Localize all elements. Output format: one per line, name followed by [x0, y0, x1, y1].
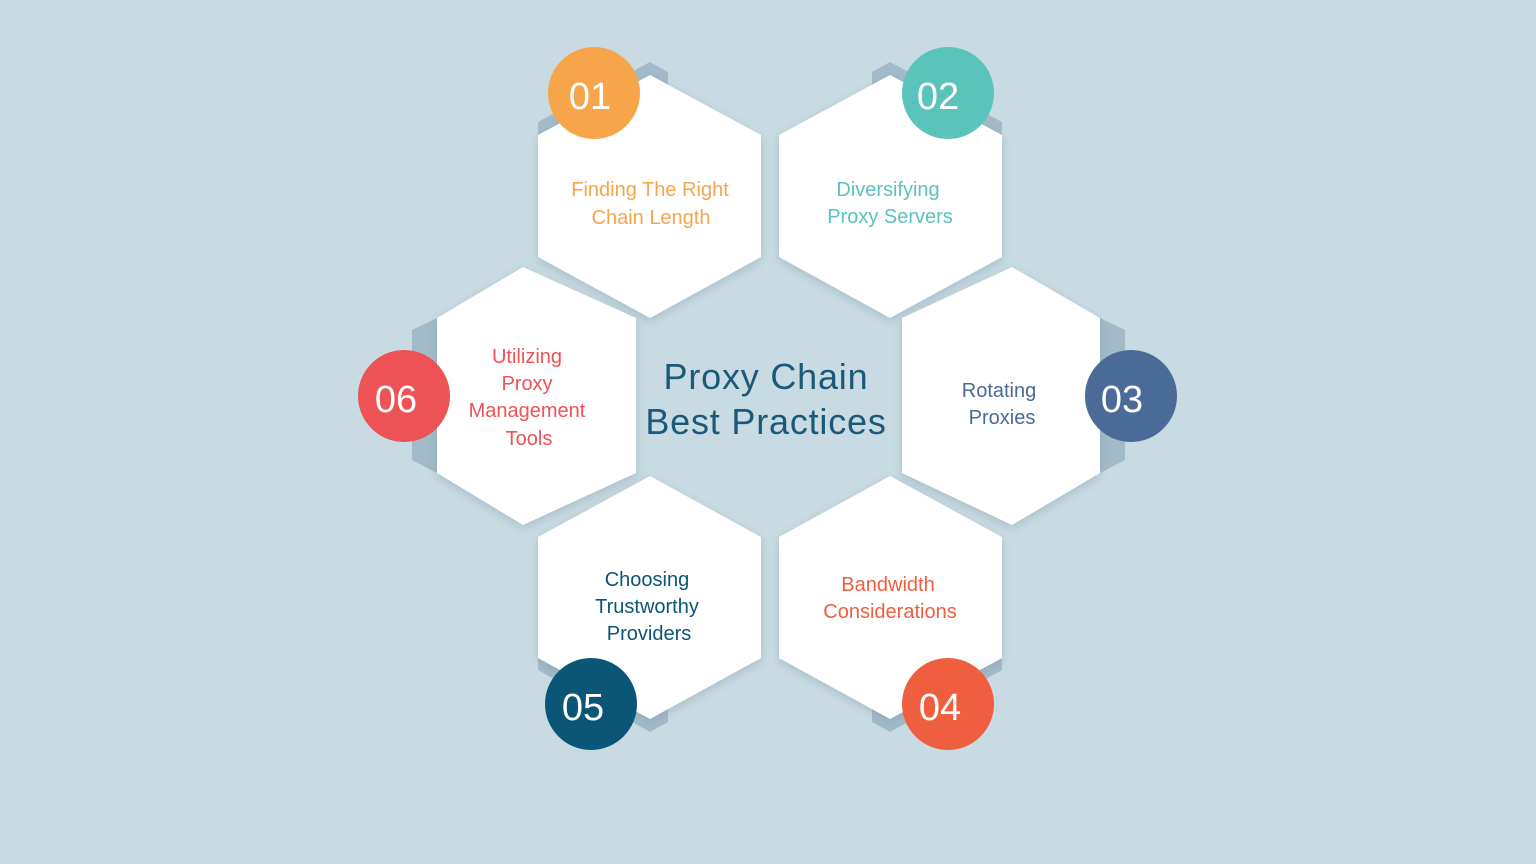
badge 01: 01: [569, 76, 611, 118]
badge 05: [545, 658, 637, 750]
badge 03: 03: [1101, 379, 1143, 421]
badge 03: [1085, 350, 1177, 442]
title: Proxy Chain: [664, 356, 868, 397]
hex 05: Choosing Trustworthy Providers: Choosing: [605, 569, 689, 591]
badge 02: 02: [917, 76, 959, 118]
hex 04: Bandwidth Considerations: [779, 476, 1002, 732]
badge 06: [358, 350, 450, 442]
hex 01: Finding The Right Chain Length: Finding The Right: [571, 179, 729, 201]
hex 06: Utilizing Proxy Management Tools: [412, 267, 636, 525]
hex 01: Finding The Right Chain Length: [538, 62, 761, 318]
hex 06: Utilizing Proxy Management Tools: Tools: [506, 428, 552, 450]
hex 06: Utilizing Proxy Management Tools: Proxy: [501, 373, 553, 395]
hex 05: Choosing Trustworthy Providers: [538, 476, 761, 732]
hex 03: Rotating Proxies: Rotating: [962, 380, 1036, 402]
hex 05: Choosing Trustworthy Providers: Providers: [607, 623, 691, 645]
badge 02: [902, 47, 994, 139]
title: Best Practices: [645, 401, 887, 442]
hex 06: Utilizing Proxy Management Tools: Utilizing: [492, 346, 562, 368]
hex 03: Rotating Proxies: [902, 267, 1125, 525]
hex 04: Bandwidth Considerations: Considerations: [823, 601, 957, 623]
badge 01: [548, 47, 640, 139]
hex 01: Finding The Right Chain Length: Chain Length: [592, 207, 710, 229]
badge 04: 04: [919, 687, 961, 729]
badge 06: 06: [375, 379, 417, 421]
hex 04: Bandwidth Considerations: Bandwidth: [841, 574, 935, 596]
hex 02: Diversifying Proxy Servers: Proxy Servers: [827, 206, 953, 228]
title: [645, 356, 887, 442]
badge 04: [902, 658, 994, 750]
hex 05: Choosing Trustworthy Providers: Trustworthy: [595, 596, 699, 618]
hex 02: Diversifying Proxy Servers: Diversifying: [836, 179, 940, 201]
hex 03: Rotating Proxies: Proxies: [969, 407, 1035, 429]
hex 06: Utilizing Proxy Management Tools: Management: [469, 400, 586, 422]
hex 02: Diversifying Proxy Servers: [779, 62, 1002, 318]
badge 05: 05: [562, 687, 604, 729]
